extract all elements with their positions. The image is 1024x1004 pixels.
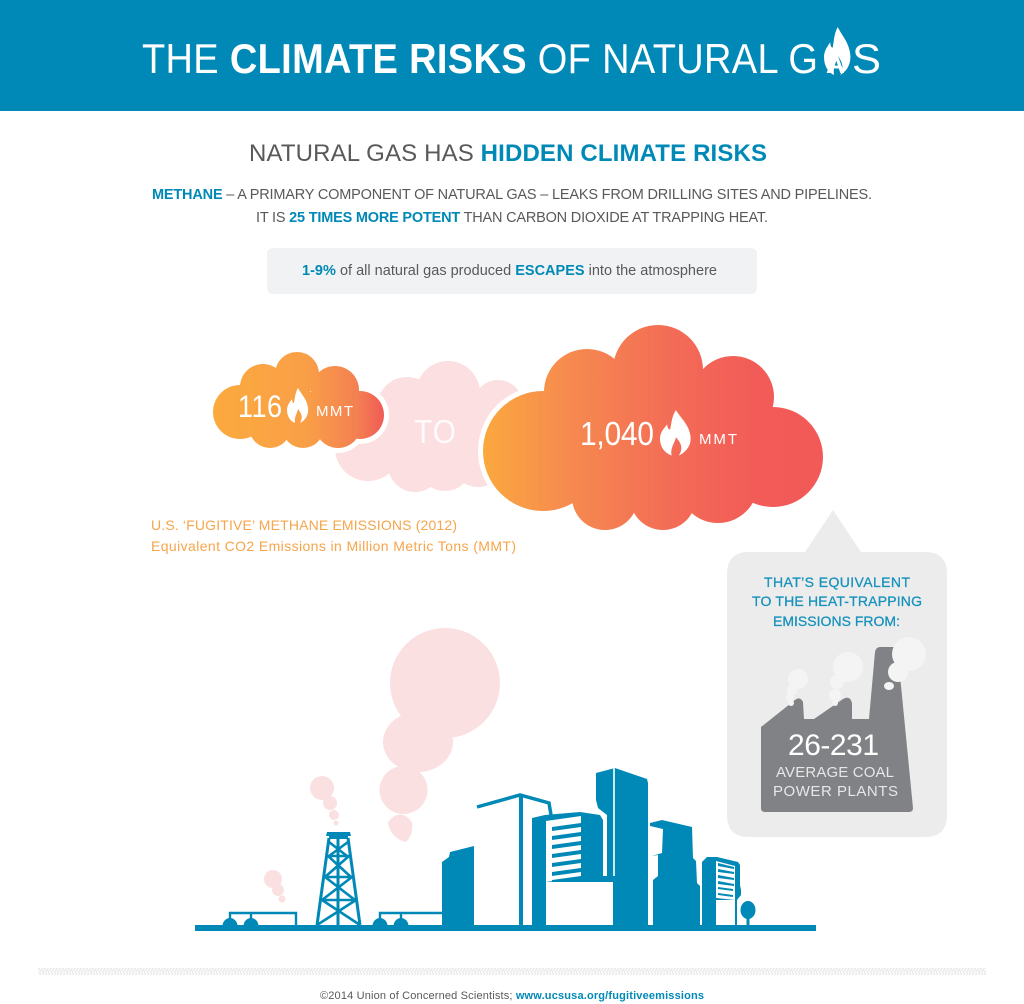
building right xyxy=(650,820,700,925)
skyline illustration xyxy=(195,768,816,931)
pink cloud: TO: TO xyxy=(414,412,456,450)
drilling derrick xyxy=(317,832,360,925)
tower xyxy=(596,768,648,925)
cloud: 1,040 MMT: MMT xyxy=(699,431,737,448)
speech bubble: coal plant equivalent: POWER PLANTS xyxy=(773,783,898,800)
cloud: 116 MMT: MMT xyxy=(316,403,353,420)
smoke plumes xyxy=(264,628,500,902)
emissions caption: Equivalent CO2 Emissions in Million Metric Tons (MMT) xyxy=(151,538,516,554)
intro text: METHANE – A PRIMARY COMPONENT OF NATURAL GAS – LEAKS FROM DRILLING SITES AND PIPELINES. xyxy=(152,187,872,203)
building small xyxy=(702,857,741,925)
heading: NATURAL GAS HAS HIDDEN CLIMATE RISKS xyxy=(249,140,767,167)
bubble text: THAT’S EQUIVALENT xyxy=(764,574,910,590)
footer divider xyxy=(38,968,986,975)
callout: escape percentage xyxy=(267,248,757,294)
icon: title flame xyxy=(824,27,850,75)
title: THE CLIMATE RISKS OF NATURAL G xyxy=(142,36,818,82)
speech bubble: coal plant equivalent xyxy=(727,510,947,837)
cloud: 116 MMT xyxy=(213,352,384,448)
building outline xyxy=(477,795,551,815)
bubble text xyxy=(752,574,922,629)
building with windows xyxy=(532,812,620,925)
icon: flame small xyxy=(287,388,308,423)
cloud: 1,040 MMT xyxy=(483,325,823,530)
emissions caption xyxy=(151,517,516,554)
speech bubble: coal plant equivalent: 26-231 xyxy=(788,729,879,762)
bubble text: EMISSIONS FROM: xyxy=(773,613,900,629)
factory smoke xyxy=(786,637,926,706)
cloud: 1,040 MMT: 1,040 xyxy=(580,414,654,452)
icon: tree xyxy=(740,901,756,926)
pipelines and tanks xyxy=(222,913,442,926)
icon: flame large xyxy=(660,410,691,456)
speech bubble: coal plant equivalent: AVERAGE COAL xyxy=(776,764,894,781)
intro text: IT IS 25 TIMES MORE POTENT THAN CARBON DIOXIDE AT TRAPPING HEAT. xyxy=(256,210,768,226)
pink cloud: TO xyxy=(335,361,523,492)
header banner xyxy=(0,0,1024,111)
emissions caption: U.S. ‘FUGITIVE’ METHANE EMISSIONS (2012) xyxy=(151,517,457,533)
callout: escape percentage: 1-9% of all natural gas produced ESCAPES into the atmosphere xyxy=(302,263,717,279)
title: A xyxy=(826,49,845,79)
icon: factory xyxy=(761,647,913,812)
intro text xyxy=(152,187,872,226)
cloud: 116 MMT: 116 xyxy=(238,390,282,424)
bubble text: TO THE HEAT-TRAPPING xyxy=(752,593,922,609)
ground line xyxy=(195,925,816,931)
building left xyxy=(442,846,474,925)
title: S xyxy=(852,35,881,82)
footer credit: ©2014 Union of Concerned Scientists; www.ucsusa.org/fugitiveemissions xyxy=(320,990,704,1002)
